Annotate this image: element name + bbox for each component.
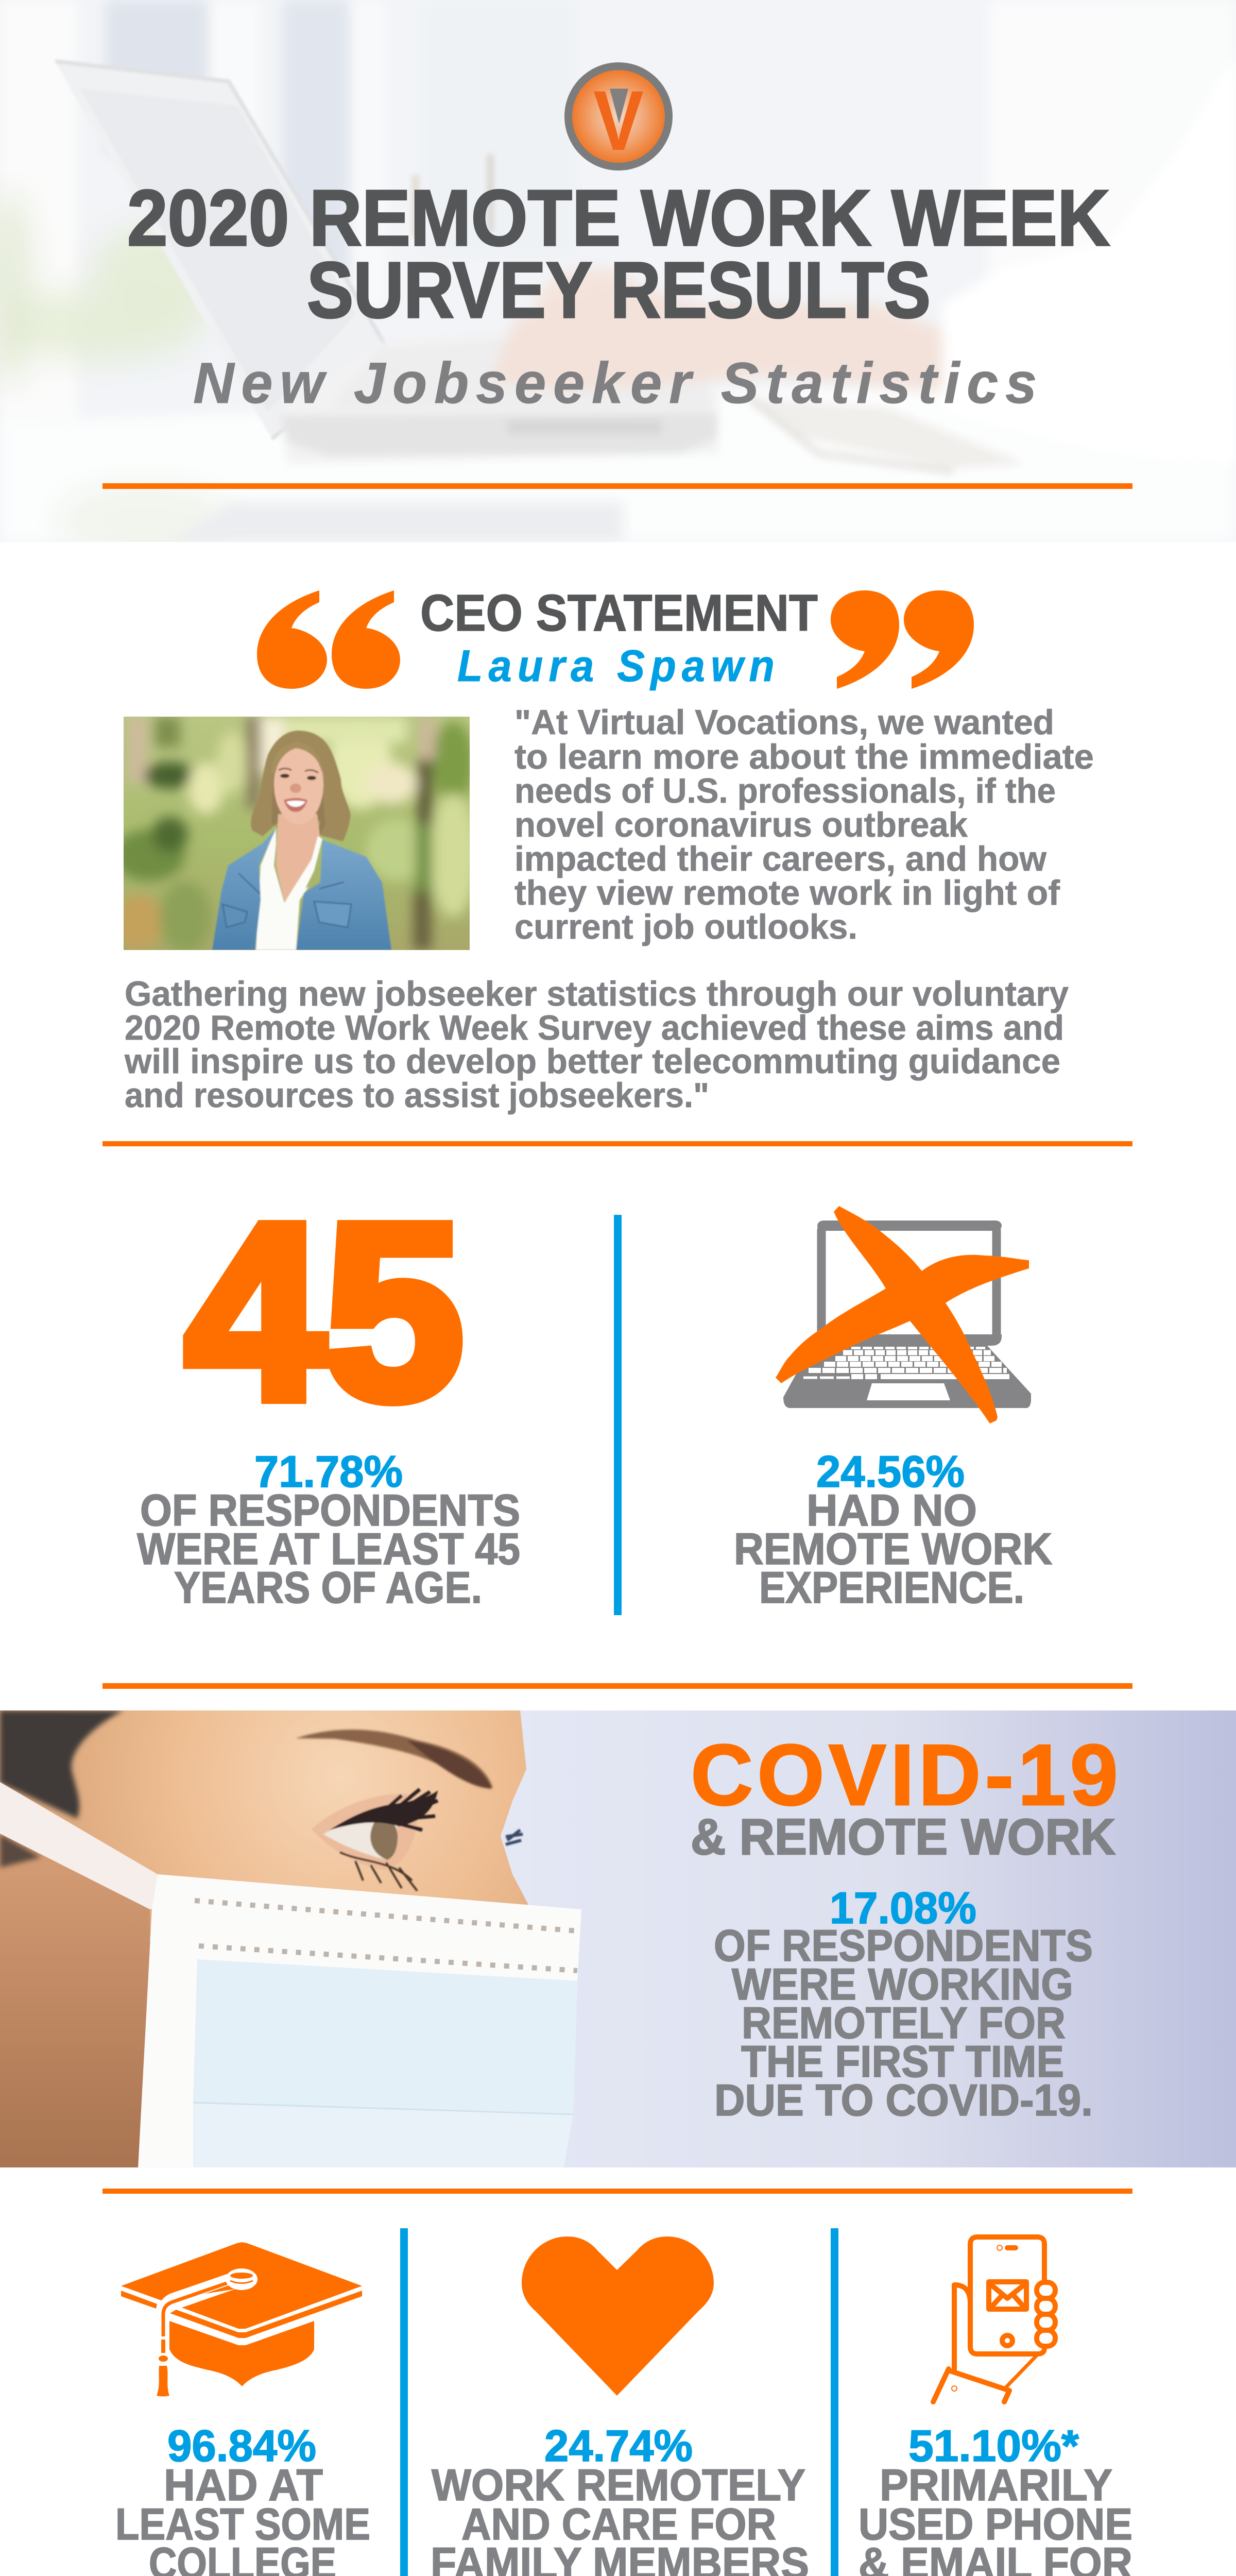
subtitle: New Jobseeker Statistics (193, 351, 1044, 415)
quote text, second block: Gathering new jobseeker statistics through our voluntary (125, 974, 1069, 1013)
stat: college experience: 96.84% (167, 2421, 316, 2471)
stat: first time remote: OF RESPONDENTS (714, 1921, 1093, 1971)
icon: heart (522, 2236, 714, 2396)
stat: first time remote: 17.08% (830, 1884, 976, 1933)
quote text, first block: impacted their careers, and how (514, 839, 1047, 878)
ear strap (0, 1782, 170, 1909)
stat: no remote experience (734, 1447, 1052, 1613)
white shirt (256, 827, 309, 950)
quote text, first block: current job outlooks. (514, 907, 857, 946)
icon: laptop crossed out (776, 1206, 1031, 1423)
photo: Laura Spawn portrait (113, 716, 476, 953)
panel: header photo background (0, 0, 1236, 556)
vertical divider right (831, 2228, 838, 2576)
divider below COVID panel (102, 2189, 1132, 2194)
neck and cheek shadow (0, 1824, 152, 2169)
divider under CEO statement (102, 1141, 1132, 1146)
quote text, second block: will inspire us to develop better telecommuting guidance (124, 1042, 1060, 1081)
stat: first time remote (714, 1884, 1093, 2125)
quote text, second block: 2020 Remote Work Week Survey achieved these aims and (125, 1008, 1064, 1047)
title: 2020 REMOTE WORK WEEK (127, 174, 1110, 262)
stat: first time remote: THE FIRST TIME (741, 2037, 1064, 2087)
quote text, second block: and resources to assist jobseekers." (125, 1076, 709, 1115)
stat: no remote experience: EXPERIENCE. (759, 1563, 1024, 1613)
icon: Virtual Vocations round logo (564, 62, 673, 171)
eyebrow (296, 1730, 493, 1789)
quote text, first block: "At Virtual Vocations, we wanted (514, 703, 1054, 742)
stat: caring for family: 24.74% (544, 2421, 693, 2471)
big number 45: 45 (185, 1172, 464, 1451)
stat: first time remote: DUE TO COVID-19. (714, 2076, 1093, 2125)
quote text, first block: they view remote work in light of (514, 873, 1060, 912)
subheading: and remote work: & REMOTE WORK (691, 1808, 1115, 1865)
stat: age 45: 71.78% (254, 1447, 403, 1497)
stat: college experience: LEAST SOME (115, 2500, 370, 2549)
hair (251, 731, 350, 841)
icon: opening quote mark (257, 590, 400, 689)
heading: CEO statement: CEO STATEMENT (420, 584, 818, 642)
icon: Virtual Vocations round logo: V (593, 73, 644, 168)
panel: COVID-19 band with masked face photo (0, 1710, 1236, 2169)
stat: caring for family: AND CARE FOR (461, 2500, 776, 2549)
quote text, second block (124, 974, 1069, 1115)
facial features (279, 769, 318, 812)
stat: age 45: WERE AT LEAST 45 (137, 1524, 520, 1574)
stat: college experience (111, 2421, 376, 2576)
quote text, first block: to learn more about the immediate (514, 737, 1094, 776)
stat: no remote experience: 24.56% (816, 1447, 965, 1497)
stat: age 45 (137, 1447, 520, 1613)
stat: first time remote: REMOTELY FOR (742, 1998, 1066, 2048)
heading: COVID-19: COVID-19 (691, 1726, 1118, 1823)
face skin (0, 1710, 536, 1937)
quote text, first block: needs of U.S. professionals, if the (514, 771, 1056, 810)
stat: age 45: YEARS OF AGE. (174, 1563, 482, 1613)
vertical divider (614, 1215, 622, 1615)
author name: Laura Spawn (457, 641, 780, 691)
neck and chest (276, 814, 320, 902)
title: SURVEY RESULTS (307, 246, 931, 334)
quote text, first block: novel coronavirus outbreak (514, 805, 968, 844)
stat: caring for family (431, 2421, 809, 2576)
stat: phone and email: 51.10%* (908, 2421, 1079, 2471)
stat: caring for family: WORK REMOTELY (432, 2461, 805, 2510)
panel: CEO statement (257, 584, 974, 691)
stat: college experience: HAD AT (164, 2461, 323, 2510)
divider under header (102, 483, 1132, 489)
denim jacket (212, 828, 277, 950)
icon: hand holding phone with email (933, 2237, 1055, 2402)
icon: graduation cap (121, 2242, 362, 2397)
stat: phone and email: PRIMARILY (880, 2461, 1112, 2510)
face (274, 744, 323, 824)
hair (0, 1710, 124, 1819)
divider above COVID panel (102, 1683, 1132, 1689)
eye (312, 1789, 523, 1891)
stat: age 45: OF RESPONDENTS (140, 1486, 520, 1535)
icon: closing quote mark (831, 590, 974, 689)
stat: no remote experience: REMOTE WORK (734, 1524, 1052, 1574)
quote text, first block (514, 703, 1094, 946)
vertical divider left (400, 2228, 408, 2576)
stat: first time remote: WERE WORKING (732, 1960, 1073, 2009)
surgical mask (138, 1874, 581, 2169)
title (127, 174, 1110, 334)
stat: phone and email: USED PHONE (859, 2500, 1132, 2549)
stat: phone and email (859, 2421, 1132, 2576)
stat: no remote experience: HAD NO (806, 1486, 977, 1535)
